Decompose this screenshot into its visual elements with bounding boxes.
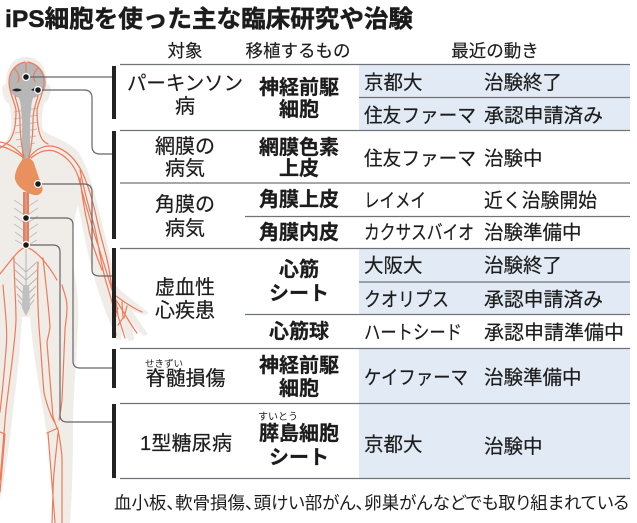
column: transplanted material: 神経前駆 xyxy=(259,76,339,99)
column: disease targets: 網膜の xyxy=(155,135,215,158)
column: current status: 治験準備中 xyxy=(484,367,582,389)
column: current status: 承認申請済み xyxy=(484,289,603,311)
column: transplanted material xyxy=(258,76,339,469)
column: transplanted material: 上皮 xyxy=(279,157,319,180)
column: institutions: 住友ファーマ xyxy=(364,148,476,170)
column: disease targets: 角膜の xyxy=(155,193,215,216)
arm vessels xyxy=(29,146,116,316)
column: transplanted material: 網膜色素 xyxy=(259,136,339,159)
column: institutions: ケイファーマ xyxy=(364,367,468,389)
black group bars xyxy=(112,66,116,478)
column: institutions: カクサスバイオ xyxy=(364,222,474,244)
column: transplanted material: 心筋球 xyxy=(269,320,329,343)
column: institutions xyxy=(364,72,476,456)
column: disease targets: 病気 xyxy=(165,217,205,240)
column: current status: 治験中 xyxy=(484,436,543,458)
column: disease targets: 心疾患 xyxy=(155,299,215,322)
blue cell backgrounds xyxy=(359,65,630,478)
column: disease targets xyxy=(127,73,243,455)
column: current status: 治験終了 xyxy=(484,72,562,94)
column: disease targets: 1型糖尿病 xyxy=(140,432,232,455)
column: current status: 治験終了 xyxy=(484,255,562,277)
column: transplanted material: すいとう xyxy=(258,411,298,423)
column: institutions: 京都大 xyxy=(364,72,423,94)
column: institutions: クオリプス xyxy=(364,289,449,311)
column headers: 対象 xyxy=(168,41,202,61)
column: disease targets: 病 xyxy=(175,95,195,118)
column: current status: 治験中 xyxy=(484,148,543,170)
connector lines with dots xyxy=(23,74,112,422)
column: transplanted material: 膵島細胞 xyxy=(259,422,339,445)
column: disease targets: パーキンソン xyxy=(127,73,243,95)
column: institutions: レイメイ xyxy=(364,190,426,212)
column: institutions: 大阪大 xyxy=(364,255,423,277)
column: current status: 承認申請済み xyxy=(484,105,603,127)
column headers xyxy=(168,41,539,61)
table rules xyxy=(120,64,630,478)
column: transplanted material: 細胞 xyxy=(279,377,319,400)
column: transplanted material: シート xyxy=(269,283,329,305)
column: institutions: ハートシード xyxy=(364,322,462,344)
column: disease targets: 脊髄損傷 xyxy=(146,367,226,390)
human body illustration xyxy=(0,57,149,523)
column: disease targets: 虚血性 xyxy=(155,276,215,299)
eyes xyxy=(12,88,39,92)
title: iPS細胞を使った主な臨床研究や治験 xyxy=(5,6,413,33)
heart xyxy=(15,158,43,195)
column: institutions: 住友ファーマ xyxy=(364,105,476,127)
hand vessels xyxy=(115,296,142,338)
column: current status xyxy=(484,72,624,458)
column: current status: 治験準備中 xyxy=(484,222,582,244)
nerves: upper spine ribs xyxy=(14,108,38,147)
column headers: 最近の動き xyxy=(451,41,539,61)
head and neck vessels xyxy=(0,62,48,157)
footnote: 血小板、軟骨損傷、頭けい部がん、卵巣がんなどでも取り組まれている xyxy=(114,493,629,513)
column: transplanted material: シート xyxy=(269,447,329,469)
column: transplanted material: 心筋 xyxy=(279,258,319,281)
lower spine nerve ticks xyxy=(14,200,38,246)
column: transplanted material: 角膜上皮 xyxy=(259,187,339,211)
column headers: 移植するもの xyxy=(246,41,350,61)
column: current status: 近く治験開始 xyxy=(484,190,597,212)
column: disease targets: 病気 xyxy=(165,157,205,180)
column: transplanted material: 細胞 xyxy=(279,98,319,121)
column: transplanted material: 角膜内皮 xyxy=(259,220,339,244)
brain and upper spine xyxy=(9,62,46,160)
torso and leg vessels xyxy=(0,247,57,492)
column: transplanted material: 神経前駆 xyxy=(259,354,339,377)
column: institutions: 京都大 xyxy=(364,434,423,456)
body silhouette xyxy=(0,57,149,523)
column: current status: 承認申請準備中 xyxy=(484,322,624,344)
spinal cord orange xyxy=(23,192,29,243)
column: disease targets: せきずい xyxy=(145,359,183,370)
lower fishbone nerves xyxy=(15,248,37,312)
